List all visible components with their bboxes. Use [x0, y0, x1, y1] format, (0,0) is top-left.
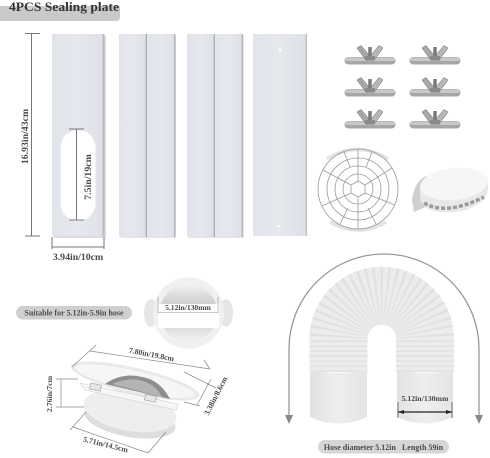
- panel: double plate 2: [119, 34, 176, 238]
- icon: round hose grille: [318, 149, 398, 230]
- icon: round hose connector with 5.12in/130mm: [144, 278, 233, 348]
- illustration: flexible hose: [310, 296, 453, 424]
- dimension: 3.38in/8.6cm: [184, 375, 230, 417]
- dimension: hose diameter 5.12in/130mm: [398, 394, 452, 418]
- panel: double plate 3: [187, 34, 244, 238]
- icon: round hose connector with 5.12in/130mm: 5.12in/130mm: [165, 303, 212, 312]
- dimension: plate width 3.94in/10cm: [52, 237, 104, 263]
- hose window opening: [60, 130, 96, 221]
- dimension: plate height 16.93in/43cm: [20, 34, 40, 236]
- hose right cuff: [397, 370, 453, 424]
- label pill: hose diameter and length: Hose diameter 5.12in Length 59in: [324, 443, 444, 452]
- panel: plate with hose window: [52, 34, 106, 238]
- heading: 4PCS Sealing plate: 4PCS Sealing plate: [9, 0, 119, 14]
- dimension: window height 7.5in/19cm: 7.5in/19cm: [83, 154, 94, 200]
- panel: single solid plate: [253, 34, 307, 236]
- dimension: 7.80in/19.8cm: [72, 345, 216, 388]
- icon group: six wing nuts with plates: [344, 46, 460, 128]
- adapter body: [68, 353, 202, 445]
- dimension: 5.71in/14.5cm: 5.71in/14.5cm: [82, 435, 129, 455]
- hose ribbed section: [338, 296, 425, 372]
- icon: sealing tape roll: [412, 165, 489, 212]
- label pill: suitable hose size: Suitable for 5.12in-5.9in hose: [24, 308, 124, 318]
- illustration: window adapter with dimensions: [45, 345, 230, 455]
- label pill: hose diameter and length: [318, 440, 449, 454]
- dimension: plate height 16.93in/43cm: 16.93in/43cm: [20, 109, 31, 164]
- dimension: 3.38in/8.6cm: 3.38in/8.6cm: [202, 375, 230, 417]
- dimension: window height 7.5in/19cm: [69, 129, 94, 220]
- dimension: 5.71in/14.5cm: [70, 412, 166, 455]
- dimension: 2.76in/7cm: [45, 375, 84, 412]
- dimension: hose diameter 5.12in/130mm: 5.12in/130mm: [402, 394, 449, 403]
- dimension: 7.80in/19.8cm: 7.80in/19.8cm: [128, 346, 175, 363]
- dimension: 2.76in/7cm: 2.76in/7cm: [45, 375, 54, 412]
- label pill: suitable hose size: [16, 306, 132, 320]
- arrow: hose length arc: [285, 254, 483, 424]
- hose left cuff: [310, 370, 367, 424]
- heading: 4PCS Sealing plate: [0, 0, 120, 21]
- dimension: plate width 3.94in/10cm: 3.94in/10cm: [53, 252, 103, 263]
